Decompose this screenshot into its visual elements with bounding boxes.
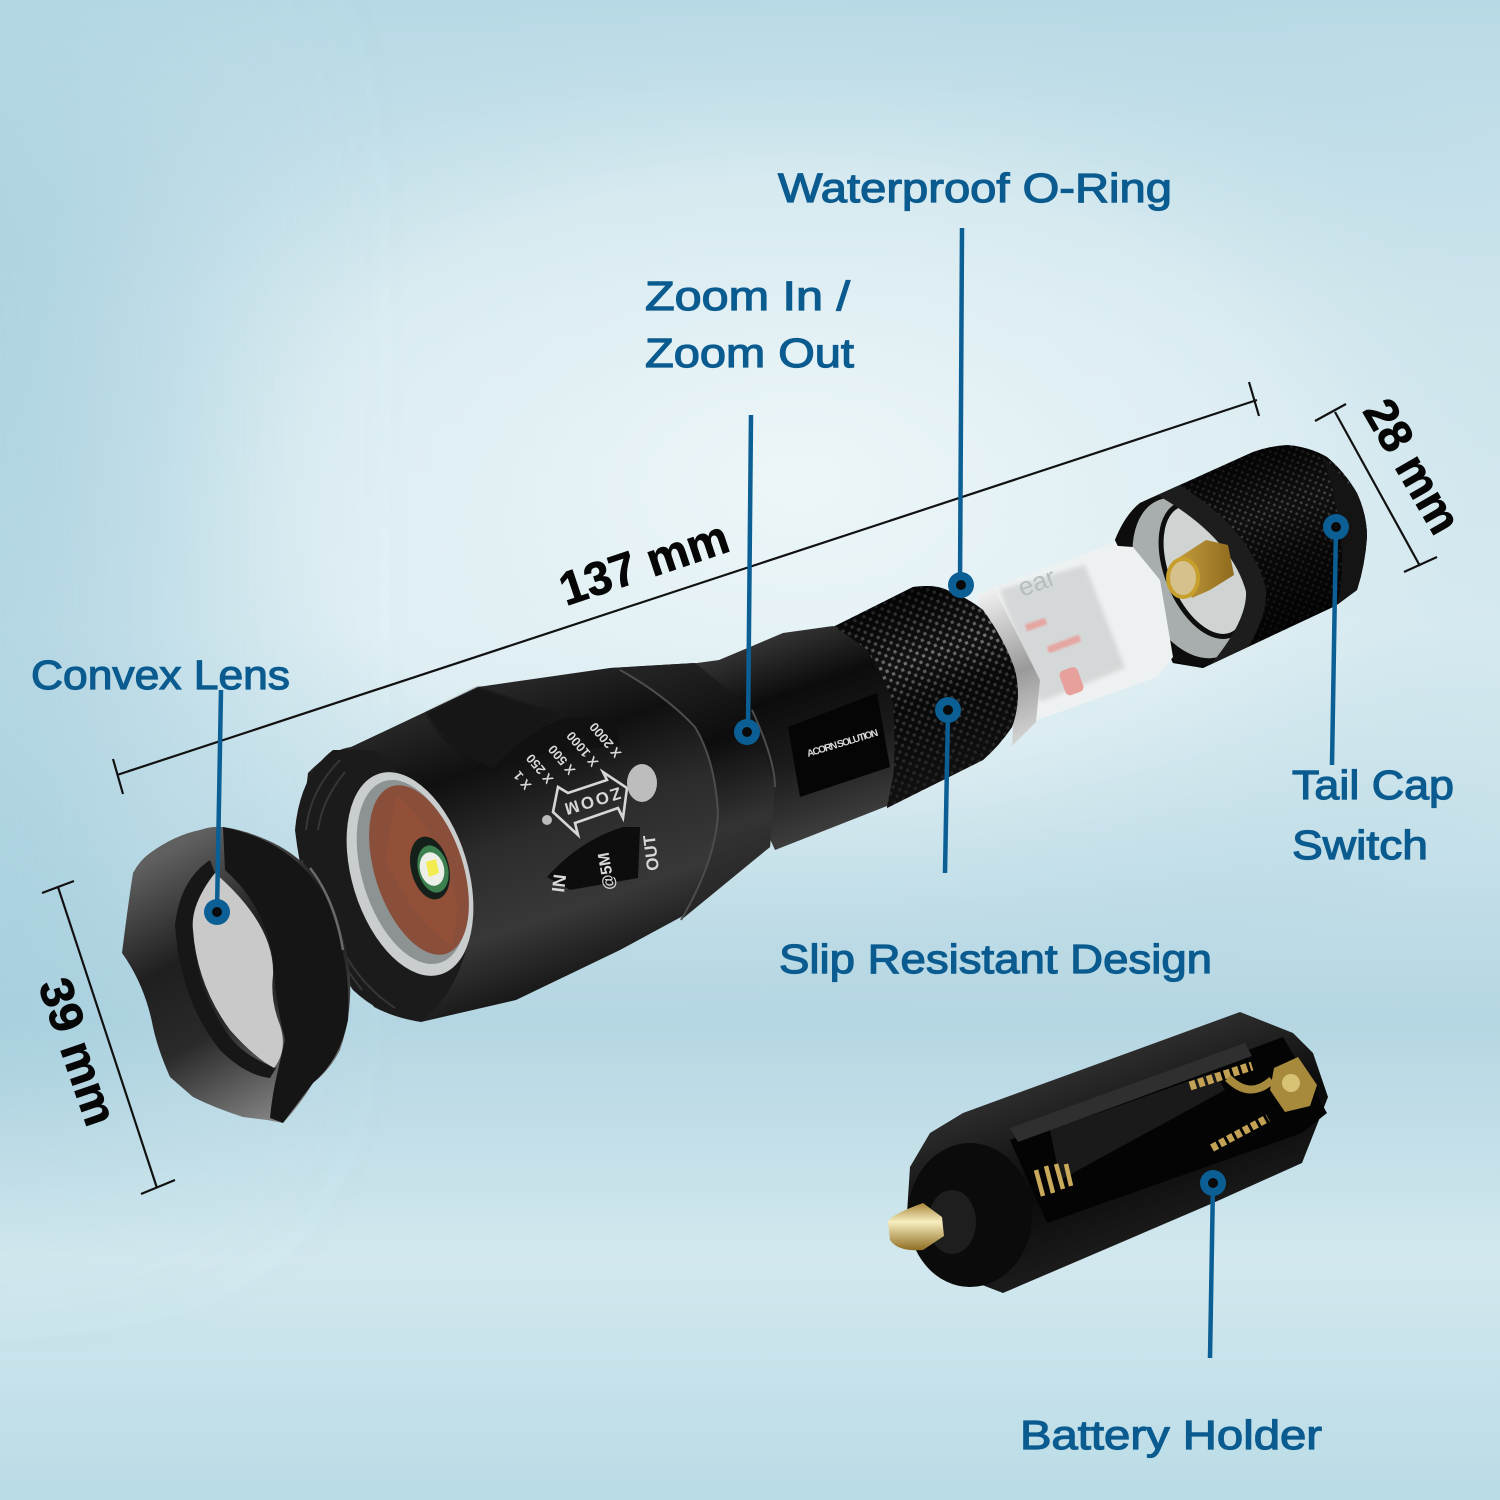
front opening with threads [295, 750, 472, 1020]
zoom markings: X 1000 [563, 729, 601, 770]
LED [404, 832, 456, 904]
callout: Waterproof O-Ring: Waterproof O-Ring [778, 165, 1172, 211]
knurled grip [833, 586, 1018, 808]
back ring [223, 827, 349, 1123]
callout: Convex Lens: Convex Lens [31, 652, 290, 698]
illustration: lens cap [122, 827, 350, 1123]
callout: Waterproof O-Ring [778, 165, 1172, 598]
gold contact pin [1172, 540, 1234, 598]
callout: Tail Cap Switch: Switch [1292, 822, 1428, 868]
battery window [1010, 1037, 1327, 1223]
callout: Tail Cap Switch: Tail Cap [1292, 762, 1454, 808]
zoom markings [493, 717, 663, 893]
gold springs and contacts [1036, 1164, 1071, 1196]
zoom markings: X 2000 [586, 720, 624, 761]
zoom markings: ZOOM [562, 783, 623, 818]
dimension: tail diameter 28 mm [1315, 390, 1472, 572]
dimension: overall length 137 mm: 137 mm [552, 510, 735, 615]
copper reflector [350, 773, 488, 967]
illustration: tail cap [1105, 445, 1367, 668]
callout: Slip Resistant Design [779, 697, 1212, 982]
shoulder band [610, 663, 775, 920]
gold tip [888, 1203, 944, 1250]
brand logo: ACORN SOLUTION [806, 728, 880, 760]
translucent battery: ear [1014, 561, 1060, 603]
opening [1115, 485, 1266, 666]
dimension: overall length 137 mm [113, 382, 1259, 794]
dimension: head diameter 39 mm [29, 881, 175, 1194]
callout: Zoom In / Zoom Out: Zoom In / [645, 273, 851, 319]
battery overlap [1105, 545, 1173, 677]
zoom markings: @5M [596, 851, 619, 891]
silver ring [324, 757, 496, 991]
callout: Zoom In / Zoom Out: Zoom Out [645, 330, 855, 376]
zoom markings: IN [548, 873, 570, 893]
dimension: head diameter 39 mm: 39 mm [29, 971, 128, 1132]
barrel with label plate [690, 626, 894, 850]
zoom markings: OUT [640, 833, 663, 872]
zoom head [299, 663, 775, 1022]
top ridge [1010, 1043, 1252, 1142]
callout: Slip Resistant Design: Slip Resistant Design [779, 936, 1212, 982]
threaded neck [978, 590, 1040, 746]
flat dark facet on head [426, 687, 554, 770]
translucent battery [987, 543, 1173, 722]
callout: Convex Lens [31, 652, 290, 925]
label plate [788, 693, 890, 797]
inner left ring [175, 860, 276, 1078]
callout: Tail Cap Switch [1292, 514, 1454, 868]
callout: Battery Holder [1020, 1170, 1322, 1458]
zoom markings: X 500 [545, 742, 578, 778]
callout: Zoom In / Zoom Out [645, 273, 855, 745]
lens glass [193, 873, 283, 1068]
callout: Battery Holder: Battery Holder [1020, 1412, 1322, 1458]
dimension: tail diameter 28 mm: 28 mm [1353, 390, 1472, 542]
illustration: battery holder [888, 1012, 1328, 1293]
illustration: flashlight body [295, 543, 1173, 1022]
end cap [908, 1143, 1032, 1287]
zoom markings: X 250 [523, 751, 556, 787]
zoom markings: X 1 [510, 768, 534, 793]
